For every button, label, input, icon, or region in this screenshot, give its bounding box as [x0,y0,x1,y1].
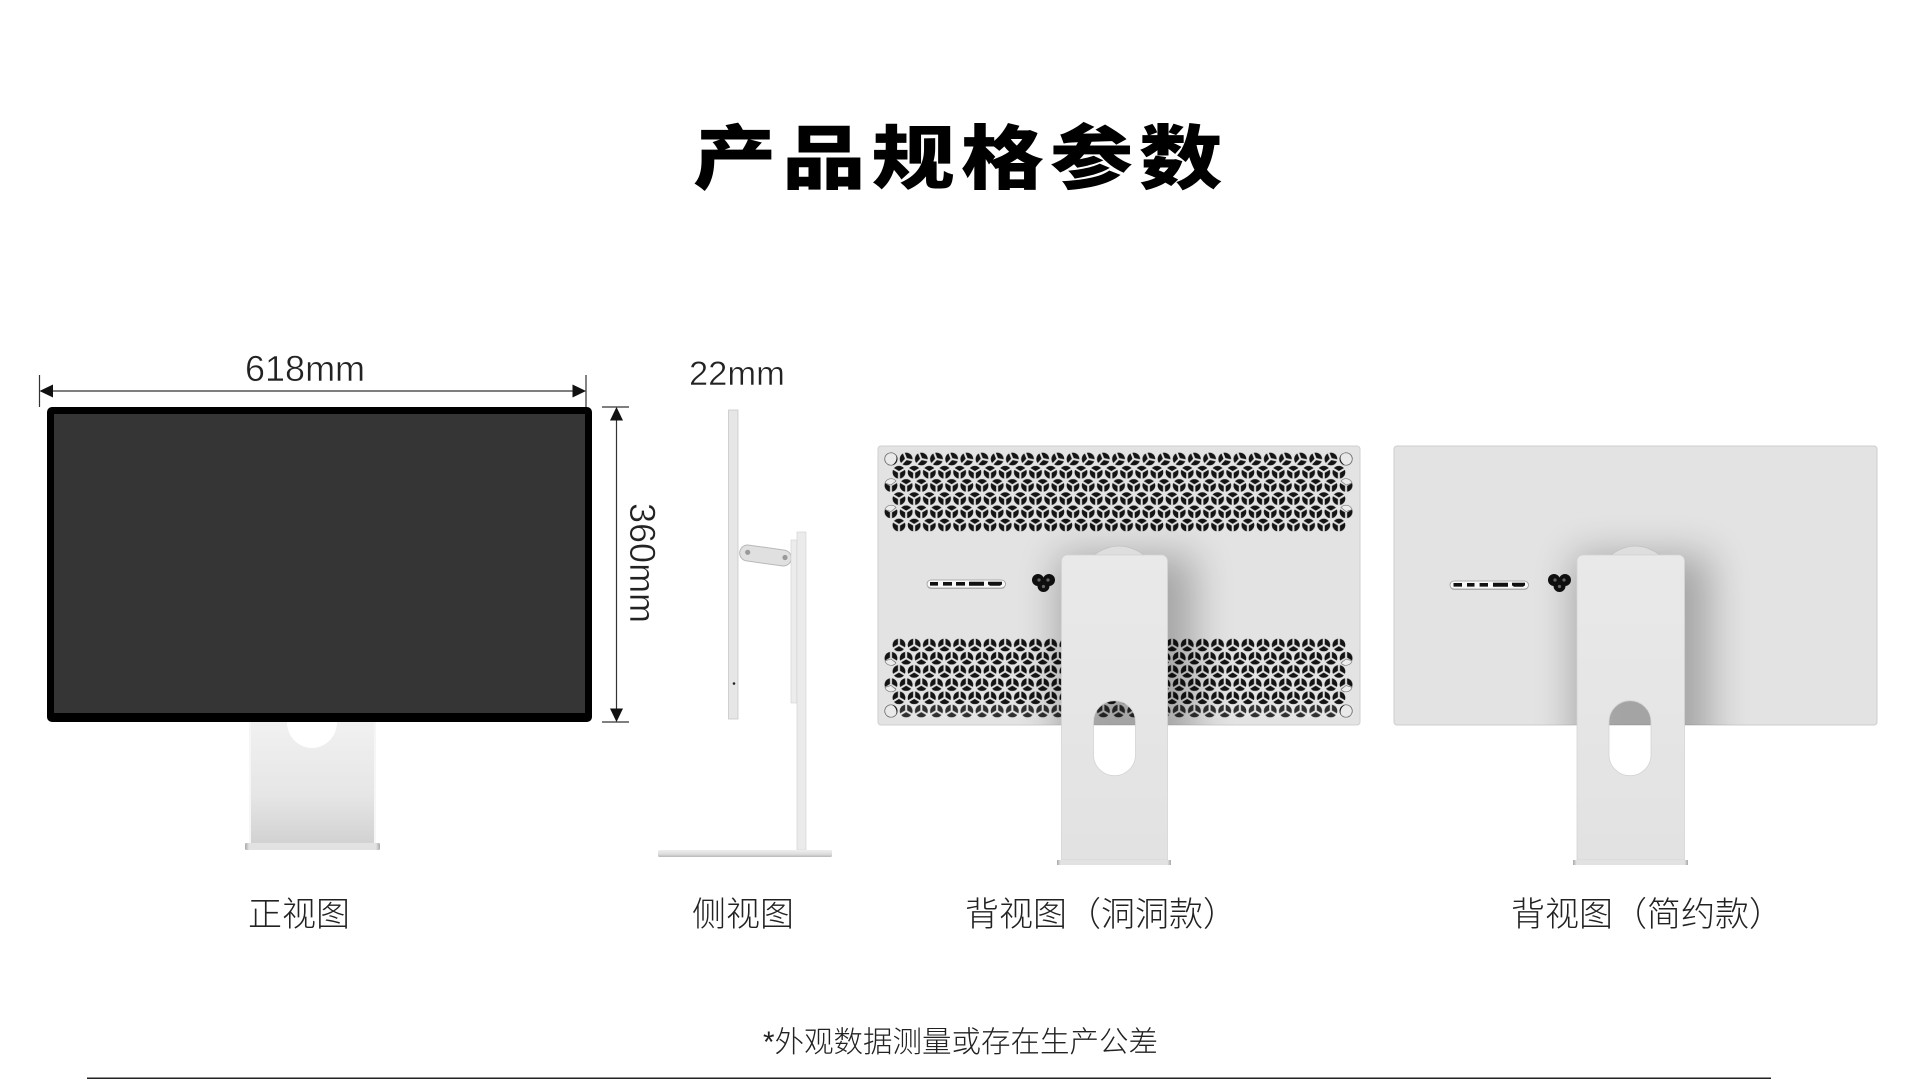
depth dimension 22mm: 22mm [689,355,785,393]
ports A [927,580,1006,589]
ports B [1450,581,1528,590]
front screen [47,407,592,722]
label: back view plain: 背视图（简约款） [1511,896,1783,934]
back view plain [1394,446,1877,865]
front stand [245,722,380,850]
side stand [658,532,832,857]
hinge B [1611,546,1660,555]
side panel [728,410,738,719]
label: side view: 侧视图 [692,896,794,934]
side view monitor [658,410,832,857]
width dimension 618mm: 618mm [245,348,365,389]
foot B [1573,860,1688,865]
stand B [1577,555,1684,860]
side hinge [739,544,792,567]
back panel A [878,446,1360,725]
upper perforations [883,452,1354,532]
back panel B [1394,446,1877,725]
height dimension 360mm [602,407,663,722]
hinge A [1094,546,1144,555]
back view with perforations [878,446,1360,865]
stand shadow A [1058,555,1194,780]
lower perforations [883,638,1354,718]
height dimension 360mm: 360mm [622,503,663,623]
front view monitor [47,407,592,850]
stand shadow B [1574,555,1710,780]
footnote: *外观数据测量或存在生产公差 [763,1026,1158,1059]
stand A [1062,555,1168,860]
width dimension 618mm [40,348,586,407]
power socket A [1032,574,1055,592]
foot A [1057,860,1171,865]
label: front view: 正视图 [248,896,350,934]
power socket B [1548,574,1571,592]
title: 产品规格参数 [693,120,1228,198]
label: back view perforated: 背视图（洞洞款） [965,896,1237,934]
